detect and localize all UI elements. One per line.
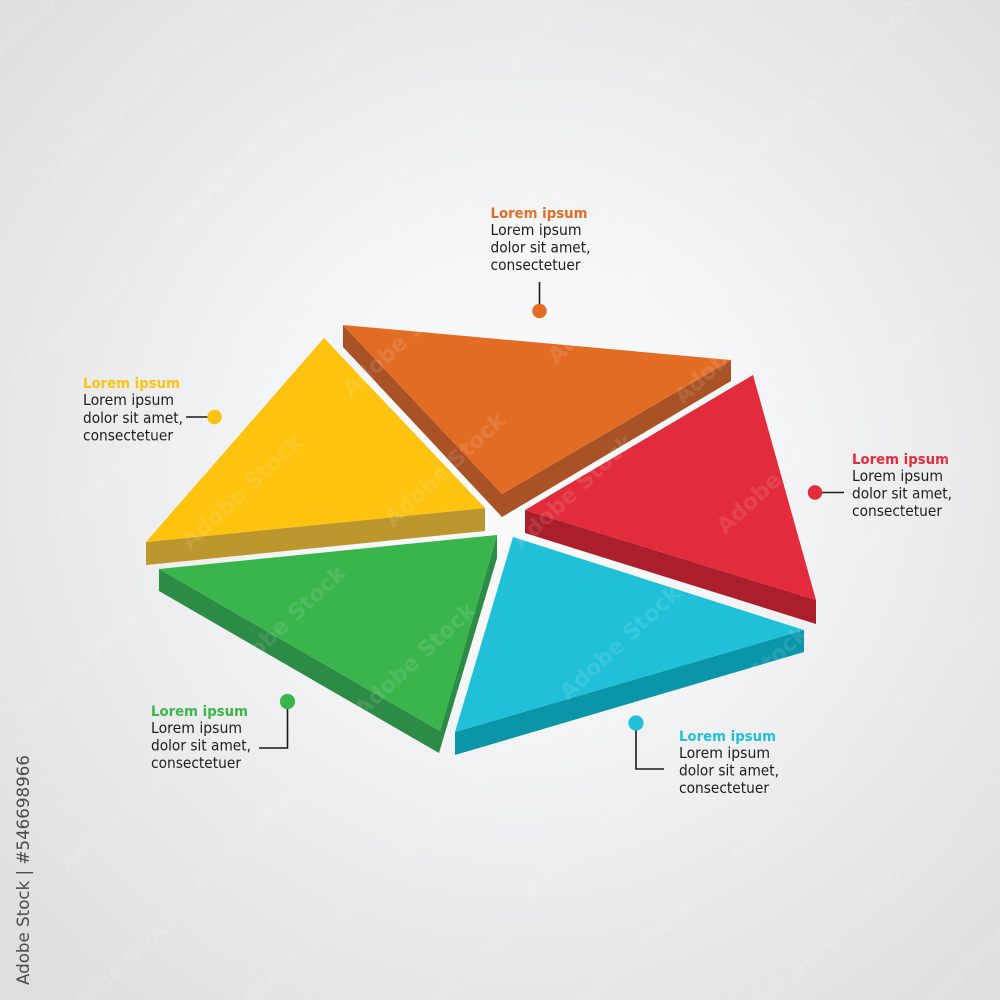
green label text: Lorem ipsum [151,704,248,720]
vertical stock id text: Adobe Stock | #546698966 [14,755,34,985]
callout: blue: consectetuer [679,779,770,797]
panel: green segment [159,535,497,753]
stock watermarks: Adobe Stock [40,64,172,189]
stock watermarks: Adobe Stock [380,407,512,532]
stock watermarks: Adobe Stock [725,744,857,869]
orange top face [343,325,731,494]
stock watermarks: Adobe Stock [15,600,147,725]
green marker dot [280,694,295,709]
orange label text: Lorem ipsum [490,206,588,222]
stock watermarks: Adobe Stock [520,780,652,905]
red label text: Lorem ipsum [852,452,949,468]
stock watermarks: Adobe Stock [220,560,352,685]
stock watermarks: Adobe Stock [838,447,970,572]
callout: blue [628,715,779,797]
stock watermarks: Adobe Stock [830,118,962,243]
green top face [159,535,497,731]
stock watermarks: Adobe Stock [508,429,640,554]
stock watermarks: Adobe Stock [670,284,802,409]
stock watermarks: Adobe Stock [543,244,675,369]
callout: green: consectetuer [151,754,242,772]
callout: yellow: Lorem ipsum [83,391,174,409]
stock watermarks: Adobe Stock [177,429,309,554]
stock watermarks: Adobe Stock [350,597,482,722]
stock watermarks: Adobe Stock [703,74,835,199]
blue side face [455,630,804,755]
blue top face [455,537,804,732]
orange marker dot [532,304,547,318]
red top face [525,375,816,600]
panel: orange segment [343,325,731,517]
callout: orange: consectetuer [490,256,581,274]
callout: yellow: consectetuer [83,426,174,444]
stock watermarks: Adobe Stock [555,580,687,705]
stock watermarks: Adobe Stock [55,752,187,877]
callout: green: Lorem ipsum [151,719,242,737]
stock watermarks: Adobe Stock [500,114,632,239]
yellow label text: Lorem ipsum [83,376,180,392]
blue marker dot [628,715,644,731]
callout: blue: Lorem ipsum [679,744,770,762]
stock watermarks: Adobe Stock [855,787,987,912]
yellow side face [146,508,485,565]
callout: yellow [83,376,222,444]
callout: orange: Lorem ipsum [490,221,582,239]
callout: orange: dolor sit amet, [490,238,590,256]
stock watermarks: Adobe Stock [338,277,470,402]
stock watermarks: Adobe Stock [390,740,522,865]
stock watermarks: Adobe Stock [167,107,299,232]
callout: green [151,694,295,772]
red side face [525,510,816,624]
stock watermarks: Adobe Stock [712,414,844,539]
orange side faces [343,325,731,517]
red marker dot [808,485,822,500]
callout: red: Lorem ipsum [852,467,943,485]
stock watermarks: Adobe Stock [210,234,342,359]
panel: blue segment [455,537,804,755]
callout: blue: dolor sit amet, [679,762,779,780]
stock watermarks: Adobe Stock [372,72,504,197]
callout: red: consectetuer [852,502,943,520]
callout: green: dolor sit amet, [151,736,251,754]
callout: orange [490,206,590,318]
callout: red: dolor sit amet, [852,484,952,502]
yellow marker dot [207,410,222,424]
callout: red [808,452,952,520]
stock watermarks: Adobe Stock [40,417,172,542]
callout: yellow: dolor sit amet, [83,409,183,427]
yellow top face [146,338,485,542]
green side faces [159,535,497,753]
stock watermarks: Adobe Stock [185,770,317,895]
panel: yellow segment [146,338,485,565]
panel: red segment [525,375,816,624]
blue label text: Lorem ipsum [679,729,776,745]
stock watermarks: Adobe Stock [682,620,814,745]
stock watermarks: Adobe Stock [5,264,137,389]
